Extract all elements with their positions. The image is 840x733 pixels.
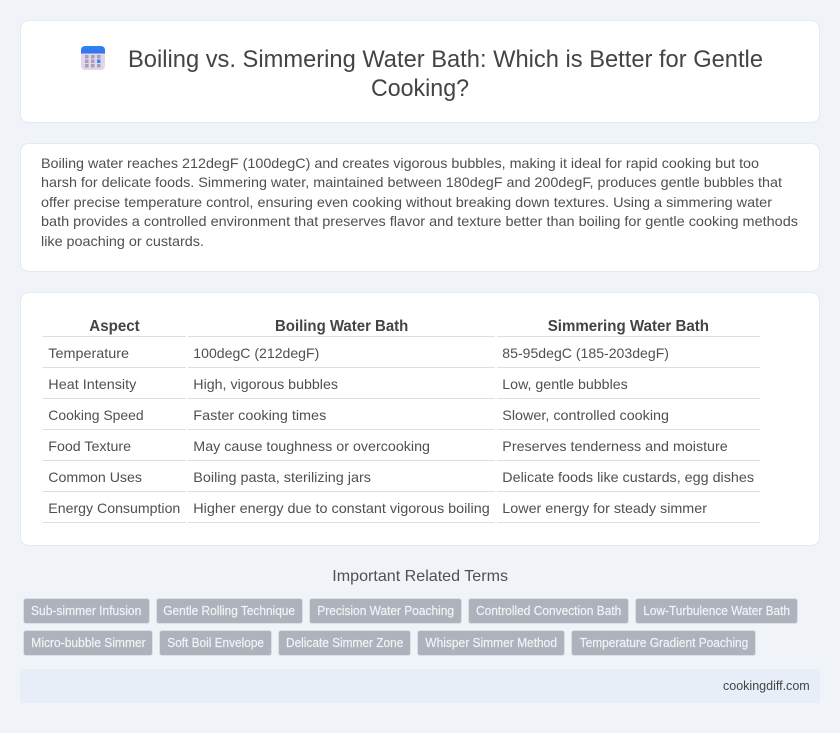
row: cooking speed (48, 407, 669, 423)
tag: Temperature Gradient Poaching (572, 630, 756, 656)
row: temperature (48, 345, 669, 361)
row: heat intensity: Low, gentle bubbles (502, 376, 628, 392)
tag: Soft Boil Envelope (160, 630, 272, 656)
table header: Simmering Water Bath (548, 318, 709, 335)
tag: Precision Water Poaching: Precision Water Poaching (317, 604, 454, 618)
icon: calendar (81, 46, 105, 70)
row: food texture: May cause toughness or overcooking (193, 438, 430, 454)
tag: Micro-bubble Simmer: Micro-bubble Simmer (31, 636, 146, 650)
row: temperature: 85-95degC (185-203degF) (502, 345, 669, 361)
tag: Delicate Simmer Zone: Delicate Simmer Zone (286, 636, 403, 650)
tag: Whisper Simmer Method (418, 630, 564, 656)
row: energy consumption: Lower energy for steady simmer (502, 500, 707, 516)
text block: introduction paragraph: offer precise temperature control, ensuring even cooking without breaking down textures. Using a simmering water (41, 194, 772, 210)
title (128, 46, 763, 102)
row: cooking speed: Faster cooking times (193, 407, 326, 423)
tag: Sub-simmer Infusion (24, 598, 150, 624)
tag: Soft Boil Envelope: Soft Boil Envelope (167, 636, 264, 650)
row: heat intensity: Heat Intensity (48, 376, 136, 392)
tag: Micro-bubble Simmer (24, 630, 152, 656)
text block: introduction paragraph: Boiling water reaches 212degF (100degC) and creates vigorous bubbles, making it ideal for rapid cooking but too (41, 155, 759, 171)
tag: Delicate Simmer Zone (278, 630, 410, 656)
text block: introduction paragraph: bath provides a controlled environment that preserves flavor and texture better than boiling for gentle cooking methods (41, 213, 798, 229)
row: cooking speed: Slower, controlled cooking (502, 407, 669, 423)
footer source text: cookingdiff.com (723, 678, 810, 693)
row: common uses (48, 469, 754, 485)
text block: introduction paragraph: harsh for delicate foods. Simmering water, maintained between 180degF and 200degF, produces gentle bubbles that (41, 174, 782, 190)
panel: introduction text (20, 144, 820, 272)
table header: Boiling Water Bath (275, 318, 408, 335)
tag: Low-Turbulence Water Bath: Low-Turbulence Water Bath (643, 604, 790, 618)
panel: related term tags (24, 598, 798, 656)
row: food texture: Preserves tenderness and moisture (502, 438, 728, 454)
row: cooking speed: Cooking Speed (48, 407, 144, 423)
tag: Low-Turbulence Water Bath (636, 598, 798, 624)
tag: Gentle Rolling Technique: Gentle Rolling Technique (163, 604, 295, 618)
tag: Controlled Convection Bath: Controlled Convection Bath (476, 604, 621, 618)
row: common uses: Boiling pasta, sterilizing jars (193, 469, 371, 485)
tag: Whisper Simmer Method: Whisper Simmer Method (425, 636, 557, 650)
table header (89, 318, 709, 335)
text block: introduction paragraph: like poaching or custards. (41, 233, 204, 249)
panel: comparison table (20, 292, 820, 546)
row: energy consumption: Higher energy due to constant vigorous boiling (193, 500, 490, 516)
row: heat intensity (48, 376, 628, 392)
row: energy consumption: Energy Consumption (48, 500, 180, 516)
table header: Aspect (89, 318, 140, 335)
tag: Temperature Gradient Poaching: Temperature Gradient Poaching (580, 636, 748, 650)
text block: introduction paragraph (41, 155, 798, 249)
row: temperature: 100degC (212degF) (193, 345, 319, 361)
row: food texture: Food Texture (48, 438, 131, 454)
row: food texture (48, 438, 728, 454)
row: common uses: Common Uses (48, 469, 142, 485)
tag: Gentle Rolling Technique (156, 598, 302, 624)
tag: Controlled Convection Bath (468, 598, 628, 624)
footer (20, 669, 820, 703)
tag: Sub-simmer Infusion: Sub-simmer Infusion (31, 604, 141, 618)
row: common uses: Delicate foods like custards, egg dishes (502, 469, 754, 485)
panel: title header (20, 20, 820, 122)
row: temperature: Temperature (48, 345, 129, 361)
heading: important related terms: Important Related Terms (332, 568, 508, 585)
title: Boiling vs. Simmering Water Bath: Which is Better for Gentle (128, 46, 763, 73)
row: energy consumption (48, 500, 707, 516)
row: heat intensity: High, vigorous bubbles (193, 376, 338, 392)
title: Cooking? (371, 75, 469, 102)
tag: Precision Water Poaching (310, 598, 462, 624)
